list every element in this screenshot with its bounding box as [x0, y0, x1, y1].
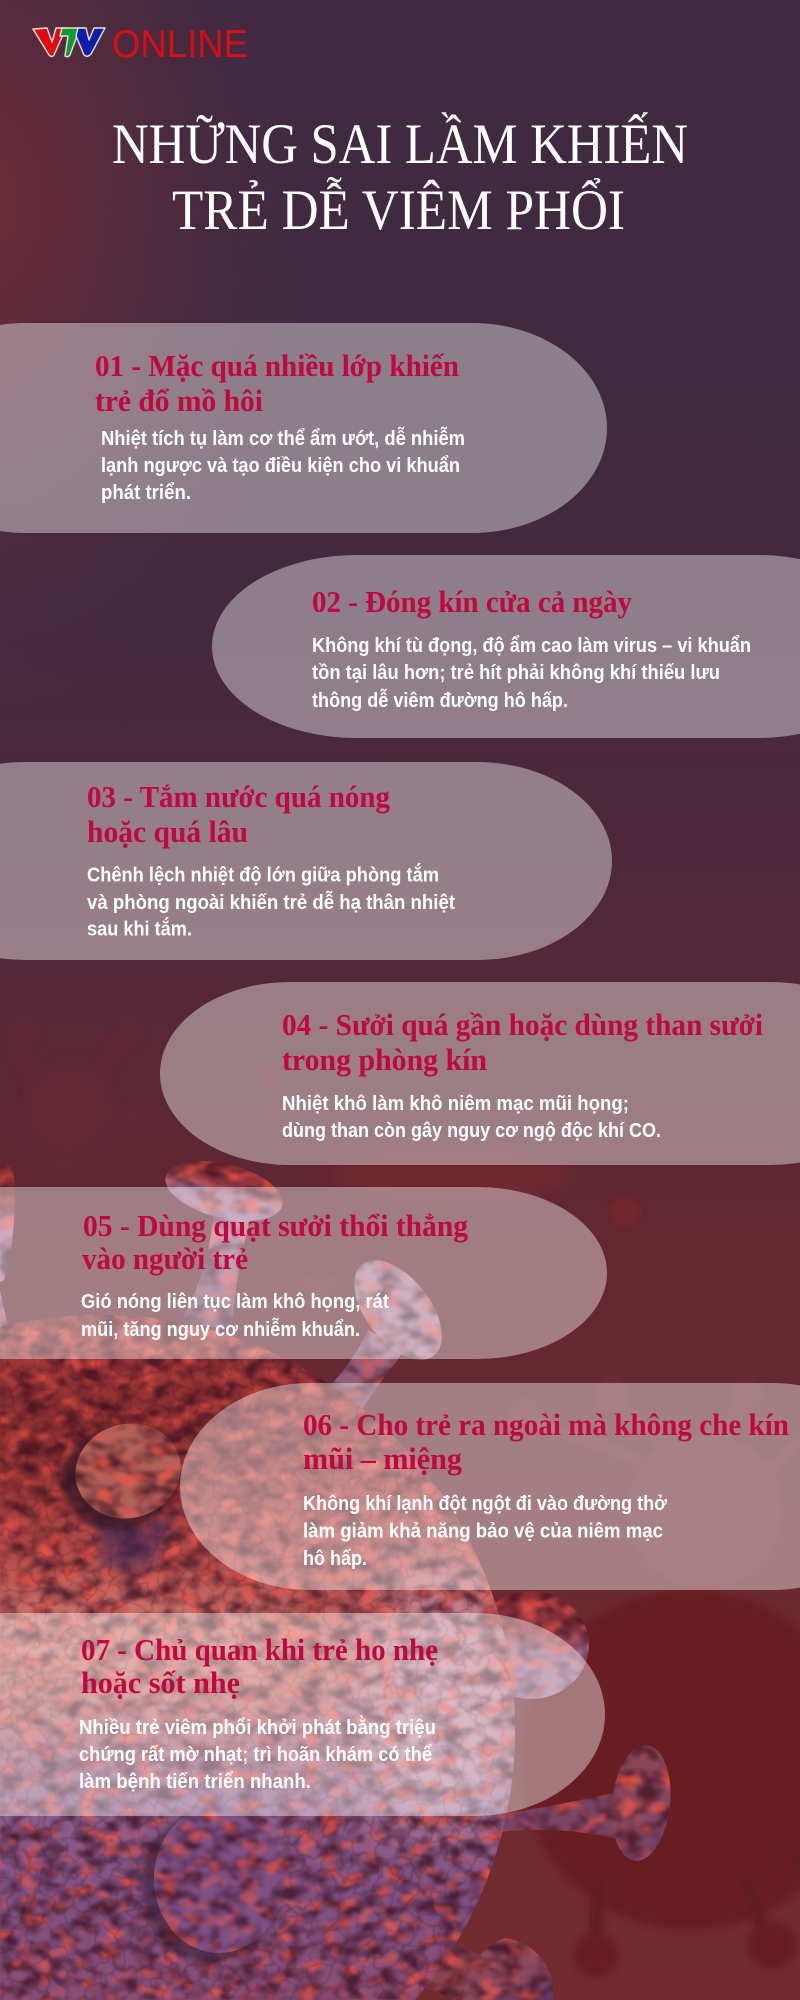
- heading 06: mũi – miệng: [303, 1441, 462, 1476]
- surface spike shadows: [49, 1413, 278, 1962]
- text 07: làm bệnh tiến triển nhanh.: [79, 1770, 311, 1793]
- text 06: [303, 1492, 667, 1570]
- panel: 06: [180, 1383, 800, 1590]
- text 03: [87, 862, 455, 940]
- text 02: Không khí tù đọng, độ ẩm cao làm virus – vi khuẩn: [312, 634, 751, 657]
- heading 07: hoặc sốt nhẹ: [81, 1665, 240, 1700]
- cell pattern: [0, 1290, 540, 2000]
- text 05: [81, 1290, 389, 1341]
- main virus illustration: [0, 1150, 676, 2000]
- text 05: mũi, tăng nguy cơ nhiễm khuẩn.: [81, 1317, 360, 1341]
- text 04: Nhiệt khô làm khô niêm mạc mũi họng;: [282, 1092, 629, 1115]
- title: [112, 112, 688, 242]
- panel: 03: [0, 762, 612, 960]
- panel: 04: [160, 982, 800, 1165]
- text 06: Không khí lạnh đột ngột đi vào đường thở: [303, 1492, 667, 1515]
- panel: 05: [0, 1187, 607, 1359]
- title: TRẺ DỄ VIÊM PHỔI: [172, 177, 625, 242]
- text 01: [101, 426, 465, 504]
- blurred background viruses: [10, 1020, 800, 1977]
- text 06: hô hấp.: [303, 1547, 367, 1570]
- icon: VTV mark: [33, 28, 105, 57]
- heading 04: trong phòng kín: [282, 1042, 487, 1077]
- heading 05: [82, 1208, 468, 1276]
- text 02: thông dễ viêm đường hô hấp.: [312, 688, 568, 712]
- outer spikes: [0, 1150, 676, 2000]
- panel: 07: [0, 1613, 605, 1816]
- text 07: Nhiều trẻ viêm phổi khởi phát bằng triệu: [79, 1715, 436, 1739]
- text 07: chứng rất mờ nhạt; trì hoãn khám có thể: [79, 1743, 432, 1766]
- heading 01: 01 - Mặc quá nhiều lớp khiến: [95, 348, 459, 383]
- heading 05: vào người trẻ: [82, 1241, 248, 1276]
- logo: VTV Online: [33, 23, 248, 66]
- text 06: làm giảm khả năng bảo vệ của niêm mạc: [303, 1520, 663, 1542]
- heading 05: 05 - Dùng quạt sưởi thổi thẳng: [83, 1208, 468, 1243]
- heading 06: [303, 1407, 789, 1476]
- heading 01: [95, 348, 459, 418]
- surface spike heads: [65, 1412, 284, 1953]
- text 01: Nhiệt tích tụ làm cơ thể ẩm ướt, dễ nhiễm: [101, 426, 465, 450]
- text 01: phát triển.: [101, 481, 191, 504]
- text 03: và phòng ngoài khiến trẻ dễ hạ thân nhiệt: [87, 890, 455, 914]
- heading 04: 04 - Sưởi quá gần hoặc dùng than sưởi: [282, 1007, 763, 1042]
- text 07: [79, 1715, 436, 1793]
- text 05: Gió nóng liên tục làm khô họng, rát: [81, 1290, 389, 1313]
- heading 03: 03 - Tắm nước quá nóng: [87, 779, 390, 814]
- text 02: [312, 634, 751, 712]
- logo wordmark: ONLINE: [112, 23, 248, 66]
- heading 03: hoặc quá lâu: [87, 814, 248, 849]
- heading 01: trẻ đổ mồ hôi: [95, 383, 263, 418]
- heading 07: [81, 1632, 438, 1700]
- panel: 01: [0, 323, 607, 533]
- heading 07: 07 - Chủ quan khi trẻ ho nhẹ: [81, 1632, 438, 1667]
- heading 03: [87, 779, 390, 849]
- text 04: dùng than còn gây nguy cơ ngộ độc khí CO.: [282, 1119, 661, 1142]
- panel: 02: [212, 555, 800, 738]
- text 03: sau khi tắm.: [87, 916, 192, 940]
- title: NHỮNG SAI LẦM KHIẾN: [112, 112, 688, 176]
- text 01: lạnh ngược và tạo điều kiện cho vi khuẩn: [101, 454, 460, 477]
- heading 04: [282, 1007, 763, 1077]
- heading 02: 02 - Đóng kín cửa cả ngày: [312, 584, 632, 619]
- text 03: Chênh lệch nhiệt độ lớn giữa phòng tắm: [87, 862, 439, 886]
- text 02: tồn tại lâu hơn; trẻ hít phải không khí thiếu lưu: [312, 661, 720, 684]
- text 04: [282, 1092, 661, 1142]
- sphere body: [0, 1315, 525, 2000]
